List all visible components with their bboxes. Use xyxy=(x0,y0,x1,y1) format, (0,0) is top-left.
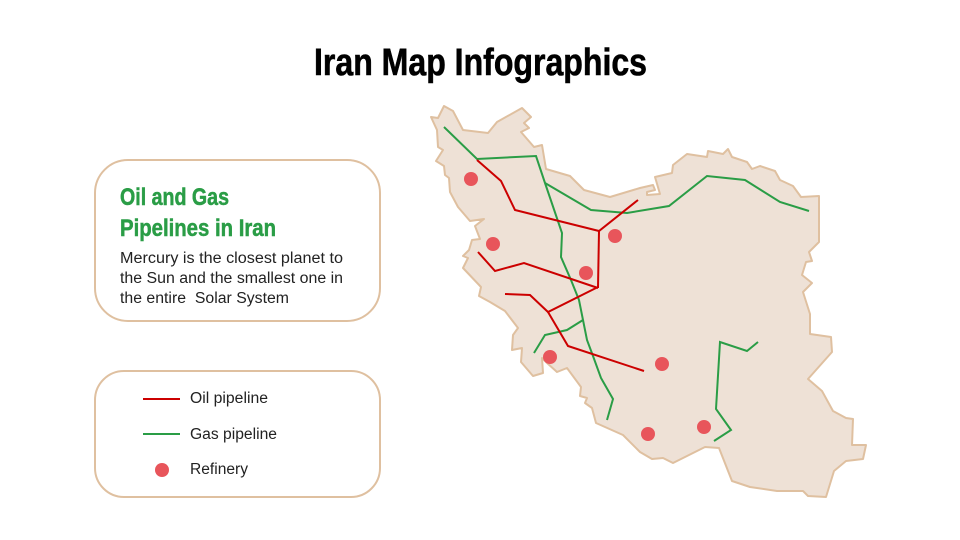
panel body text: the Sun and the smallest one in xyxy=(120,270,343,287)
gas pipelines xyxy=(444,127,809,441)
panel heading xyxy=(120,184,276,242)
panel heading: Oil and Gas xyxy=(120,184,229,211)
panel body text xyxy=(120,250,343,307)
panel body text: the entire Solar System xyxy=(120,290,289,307)
legend: refinery: Refinery xyxy=(190,461,248,478)
oil pipelines xyxy=(477,160,644,371)
map outline xyxy=(431,106,866,497)
map of Iran xyxy=(431,106,866,497)
panel heading: Pipelines in Iran xyxy=(120,215,276,242)
panel: oil and gas description xyxy=(95,160,380,321)
legend: refinery xyxy=(155,461,248,478)
legend: oil pipeline: Oil pipeline xyxy=(190,390,268,407)
legend: oil pipeline xyxy=(143,390,268,407)
title: Iran Map Infographics xyxy=(314,42,647,84)
refinery markers xyxy=(464,172,711,441)
panel: legend xyxy=(95,371,380,497)
legend: gas pipeline: Gas pipeline xyxy=(190,426,277,443)
panel body text: Mercury is the closest planet to xyxy=(120,250,343,267)
legend: gas pipeline xyxy=(143,426,277,443)
